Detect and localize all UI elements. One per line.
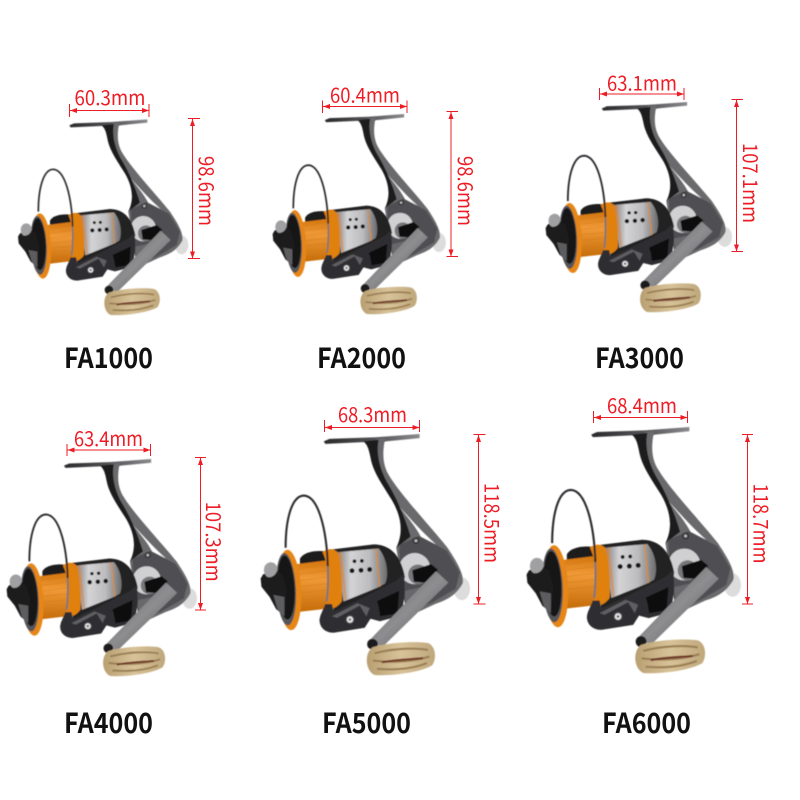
model label: FA6000 <box>602 702 691 742</box>
model label: FA1000 <box>64 337 153 377</box>
panel: FA1000 <box>18 82 222 377</box>
reel image: FA1000 <box>18 119 188 315</box>
width dimension: 63.4mm: 63.4mm <box>74 423 143 452</box>
reel image: FA3000 <box>546 102 732 312</box>
panel: FA2000 <box>273 80 481 377</box>
height dimension: 107.3mm: 107.3mm <box>200 502 229 582</box>
model label: FA4000 <box>64 702 153 742</box>
height dimension: 118.7mm <box>742 434 776 604</box>
panel: FA4000 <box>7 423 229 742</box>
reel image: FA4000 <box>7 459 197 676</box>
height dimension: 98.6mm: 98.6mm <box>452 156 481 226</box>
width dimension: 68.3mm: 68.3mm <box>338 399 407 428</box>
width dimension: 60.3mm: 60.3mm <box>74 82 146 111</box>
height dimension: 118.5mm: 118.5mm <box>478 483 508 563</box>
height dimension: 107.1mm <box>732 100 766 252</box>
height dimension: 107.3mm <box>195 458 229 610</box>
reel image: FA2000 <box>273 114 446 314</box>
panel: FA5000 <box>261 399 508 742</box>
reel image: FA5000 <box>261 434 470 675</box>
model label: FA5000 <box>322 702 411 742</box>
width dimension: 68.4mm: 68.4mm <box>607 390 677 419</box>
height dimension: 98.6mm: 98.6mm <box>193 156 222 226</box>
model label: FA2000 <box>317 337 406 377</box>
height dimension: 98.6mm <box>188 118 222 258</box>
height dimension: 98.6mm <box>446 112 481 256</box>
width dimension: 63.1mm: 63.1mm <box>607 68 677 96</box>
panel: FA6000 <box>527 390 776 742</box>
panel: FA3000 <box>546 68 766 377</box>
model label: FA3000 <box>595 337 684 377</box>
reel image: FA6000 <box>527 427 741 673</box>
height dimension: 118.7mm: 118.7mm <box>748 484 776 564</box>
height dimension: 107.1mm: 107.1mm <box>737 143 766 223</box>
height dimension: 118.5mm <box>474 434 508 604</box>
width dimension: 60.4mm: 60.4mm <box>330 80 400 108</box>
